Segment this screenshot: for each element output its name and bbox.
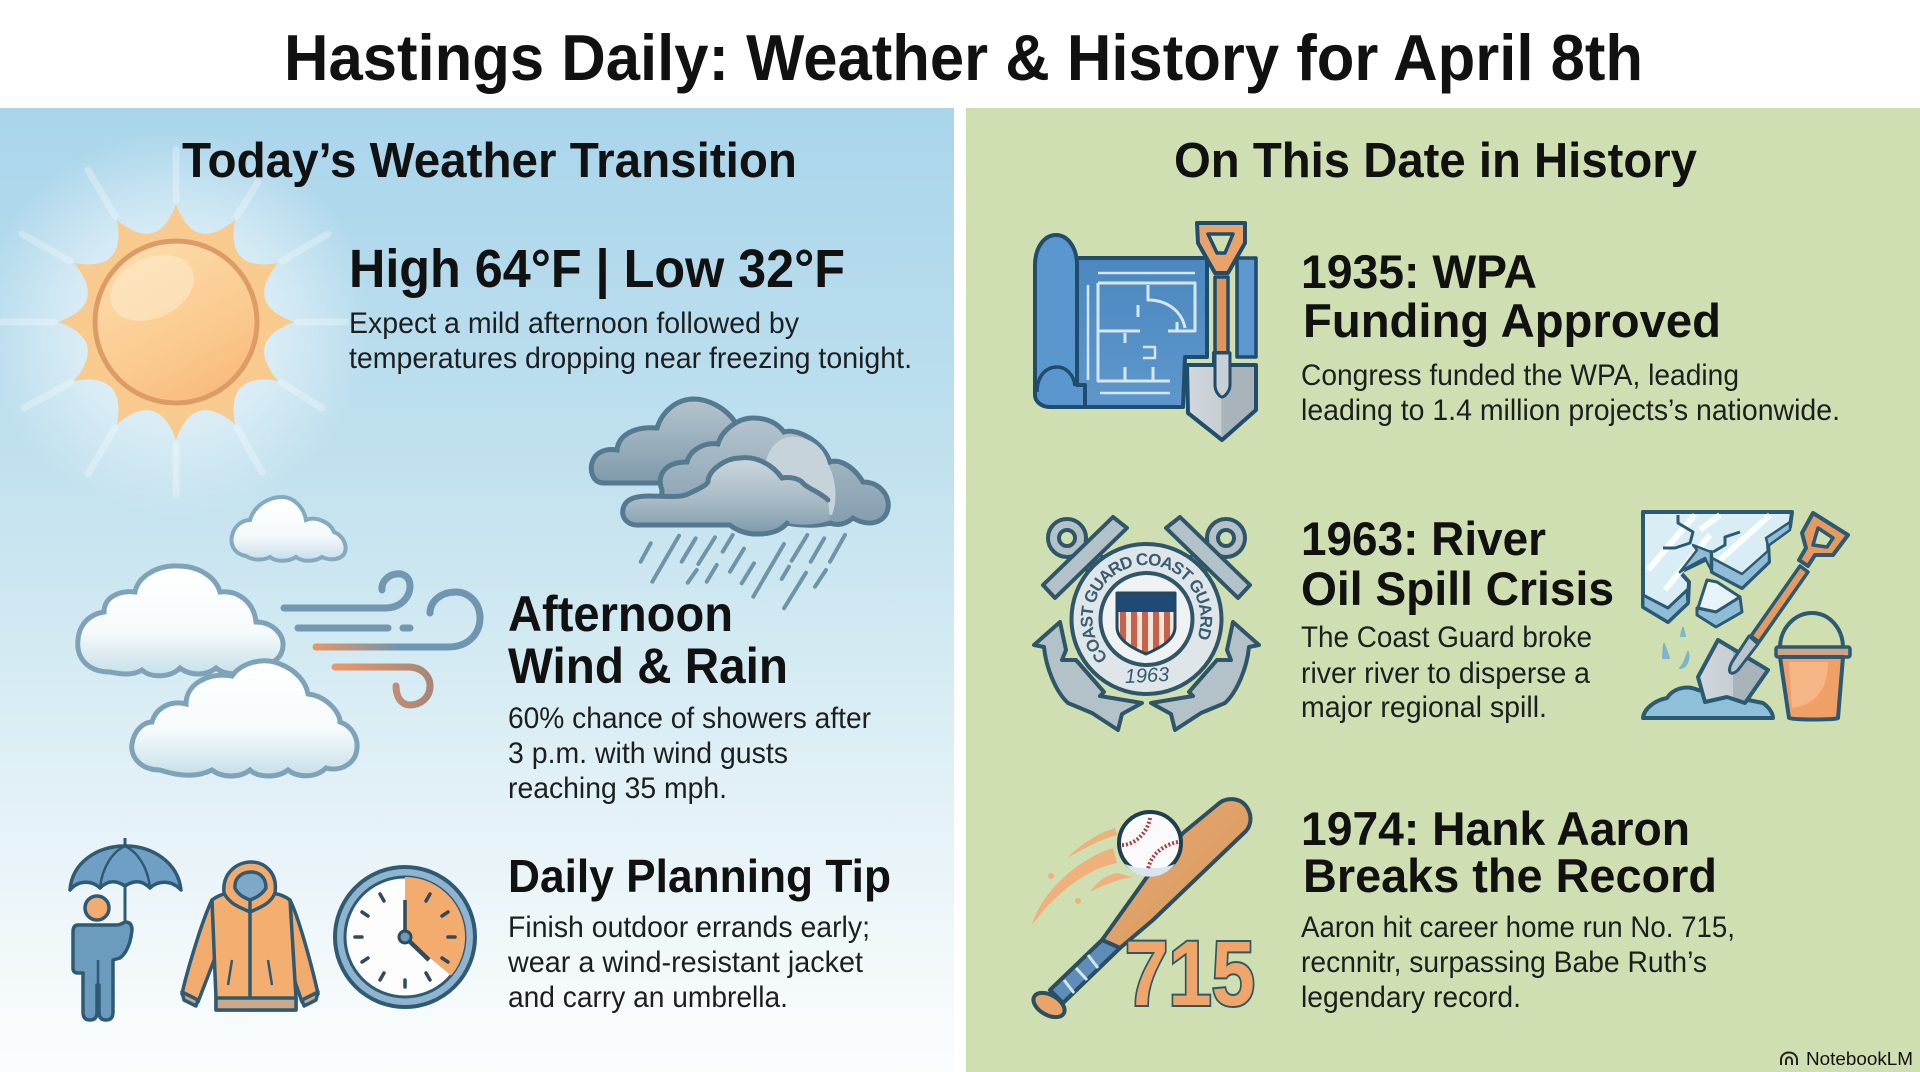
planning tip description: Finish outdoor errands early; (508, 911, 870, 944)
emblem shield (1116, 592, 1176, 658)
event description 1963: major regional spill. (1301, 691, 1547, 724)
wind and rain description: 3 p.m. with wind gusts (508, 737, 788, 770)
planning tip description: wear a wind-resistant jacket (507, 946, 864, 979)
icon: clock (335, 867, 475, 1007)
event description 1963 (1301, 621, 1592, 724)
wind and rain heading: Wind & Rain (508, 638, 788, 694)
panel: history (966, 108, 1920, 1072)
icon: storm cloud with rain (591, 399, 888, 608)
watermark: NotebookLM (1806, 1049, 1913, 1069)
speed swooshes (1032, 828, 1132, 925)
icon: jacket (182, 862, 318, 1010)
event heading 1963: 1963: River (1301, 512, 1546, 565)
event description 1935: Congress funded the WPA, leading (1301, 359, 1739, 392)
wind and rain description: reaching 35 mph. (508, 772, 727, 805)
event description 1935 (1301, 359, 1840, 427)
event description 1935: leading to 1.4 million projects’s nationwide. (1301, 394, 1840, 427)
panel: weather (0, 108, 954, 1072)
icon: white cloud lower (132, 661, 357, 776)
icon: person with umbrella (70, 838, 181, 1020)
event heading 1963 (1301, 512, 1614, 615)
wind and rain heading (508, 586, 788, 694)
planning tip description: and carry an umbrella. (508, 981, 788, 1014)
event heading 1935 (1301, 245, 1721, 347)
event description 1974: Aaron hit career home run No. 715, (1301, 911, 1735, 944)
icon: baseball bat with ball and 715 (1029, 799, 1255, 1025)
event description 1974: legendary record. (1301, 981, 1521, 1014)
icon: blueprint and shovel (1035, 223, 1256, 440)
event heading 1935: 1935: WPA (1301, 245, 1537, 298)
planning tip heading: Daily Planning Tip (508, 850, 891, 902)
event description 1974 (1301, 911, 1735, 1014)
temperature description (349, 307, 912, 375)
wind and rain description: 60% chance of showers after (508, 702, 871, 735)
bat (1029, 799, 1250, 1022)
event heading 1974: Breaks the Record (1303, 849, 1717, 902)
event description 1963: river river to disperse a (1301, 657, 1590, 690)
weather heading: Today’s Weather Transition (182, 134, 797, 188)
icon: wind lines (284, 574, 480, 705)
temperature heading: High 64°F | Low 32°F (349, 239, 845, 300)
wind and rain description (508, 702, 871, 805)
event heading 1974 (1301, 802, 1717, 902)
emblem ring text: COAST GUARD COAST GUARD (1080, 553, 1212, 662)
icon: small white cloud (232, 497, 346, 561)
event heading 1935: Funding Approved (1303, 294, 1721, 347)
event description 1963: The Coast Guard broke (1301, 621, 1592, 654)
icon: white cloud upper (78, 566, 283, 676)
wind and rain heading: Afternoon (508, 586, 733, 642)
temperature description: temperatures dropping near freezing tonight. (349, 342, 912, 375)
emblem year: 1963 (1124, 664, 1170, 688)
icon: broken ice, shovel and bucket (1643, 512, 1850, 720)
baseball (1119, 812, 1181, 877)
icon: sun (0, 127, 371, 517)
icon: coast guard emblem (1032, 514, 1262, 732)
planning tip description (507, 911, 870, 1014)
title: Hastings Daily: Weather & History for April 8th (284, 21, 1643, 94)
event description 1974: recnnitr, surpassing Babe Ruth’s (1301, 946, 1707, 979)
history heading: On This Date in History (1174, 134, 1697, 188)
temperature description: Expect a mild afternoon followed by (349, 307, 799, 340)
number 715: 715 (1125, 923, 1255, 1025)
event heading 1963: Oil Spill Crisis (1301, 562, 1614, 615)
event heading 1974: 1974: Hank Aaron (1301, 802, 1690, 855)
